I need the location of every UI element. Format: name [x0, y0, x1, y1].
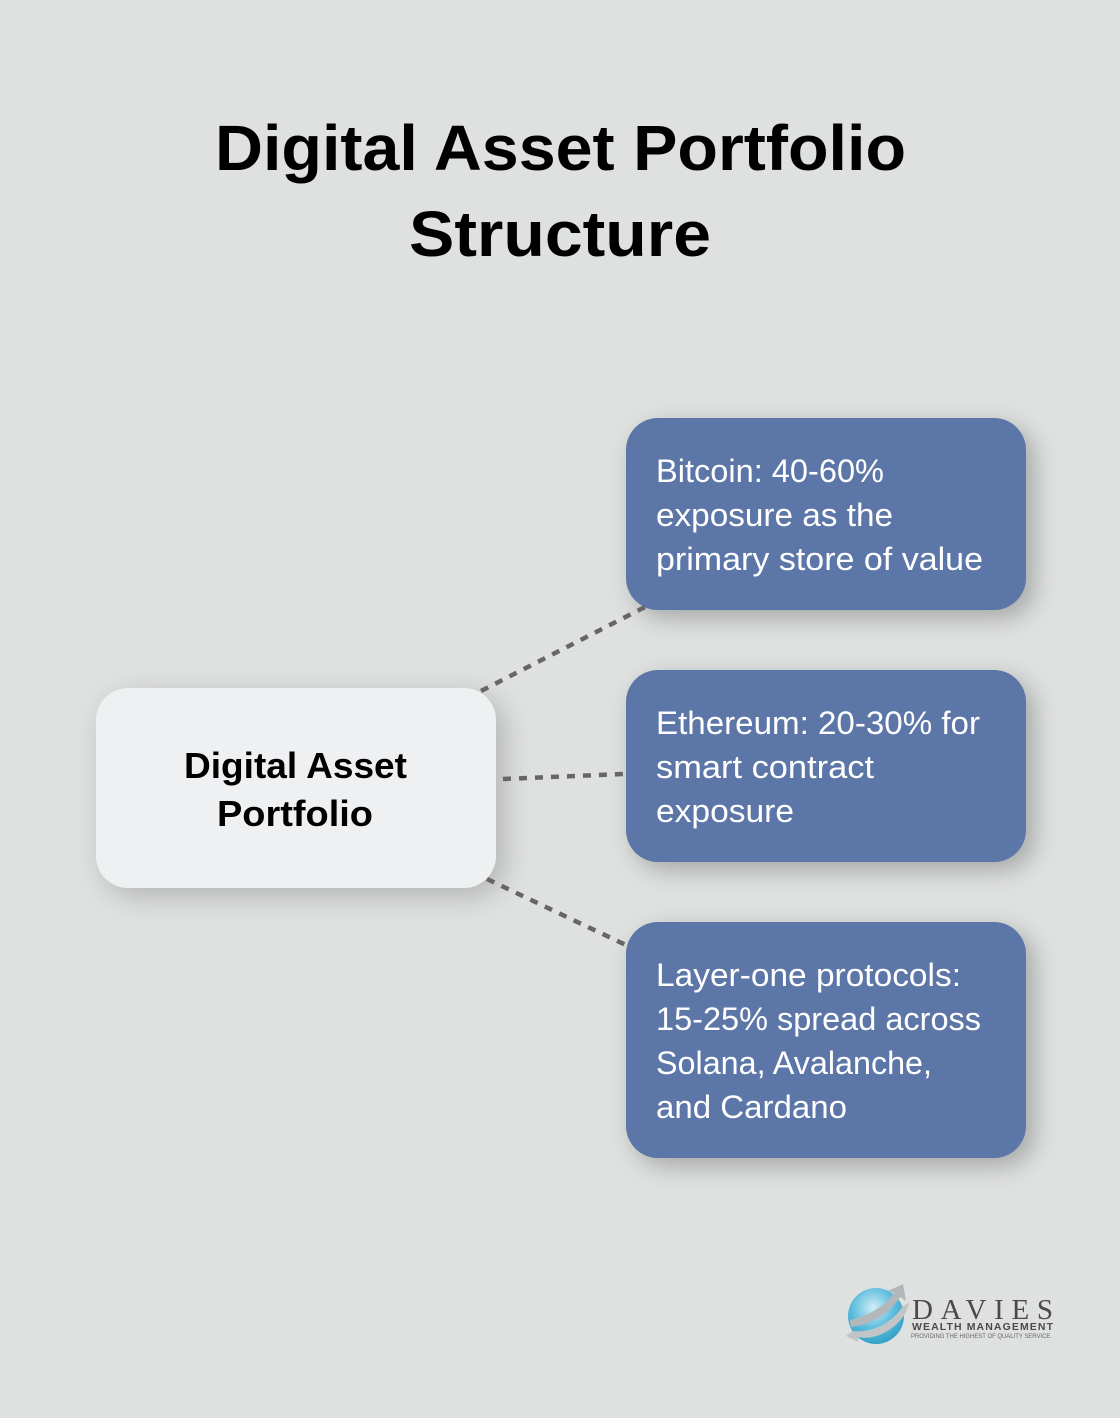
Bitcoin card text: Bitcoin: 40-60%: [656, 453, 884, 489]
logo wordmark: DAVIES: [912, 1294, 1053, 1326]
arrow: connector to Layer-one card: [487, 879, 630, 947]
Layer-one card text: Layer-one protocols:: [656, 957, 961, 993]
source node label: Portfolio: [217, 793, 373, 834]
title: Digital Asset Portfolio: [215, 112, 906, 184]
Layer-one card text: 15-25% spread across: [656, 1001, 981, 1037]
Bitcoin card text: exposure as the: [656, 497, 893, 533]
title: Structure: [409, 198, 711, 270]
arrow: connector to Bitcoin card: [481, 607, 645, 691]
source node label: [184, 745, 407, 834]
Ethereum card text: [656, 705, 980, 829]
logo: Davies Wealth Management: [846, 1284, 1054, 1344]
Ethereum card text: exposure: [656, 793, 794, 829]
logo subtitle: WEALTH MANAGEMENT: [912, 1321, 1054, 1333]
Layer-one card text: Solana, Avalanche,: [656, 1045, 932, 1081]
title: [215, 112, 906, 270]
Bitcoin card text: [656, 453, 983, 577]
panel: Layer-one protocols allocation card: [626, 922, 1026, 1158]
panel: Bitcoin allocation card: [626, 418, 1026, 610]
Ethereum card text: Ethereum: 20-30% for: [656, 705, 980, 741]
source node label: Digital Asset: [184, 745, 407, 786]
arrow: connector to Ethereum card: [503, 774, 623, 779]
Layer-one card text: [656, 957, 981, 1125]
panel: Ethereum allocation card: [626, 670, 1026, 862]
Bitcoin card text: primary store of value: [656, 541, 983, 577]
logo tagline: PROVIDING THE HIGHEST OF QUALITY SERVICE.: [911, 1333, 1052, 1340]
Layer-one card text: and Cardano: [656, 1089, 847, 1125]
icon: globe with arrows: [846, 1284, 909, 1344]
Ethereum card text: smart contract: [656, 749, 874, 785]
panel: source node Digital Asset Portfolio: [96, 688, 496, 888]
